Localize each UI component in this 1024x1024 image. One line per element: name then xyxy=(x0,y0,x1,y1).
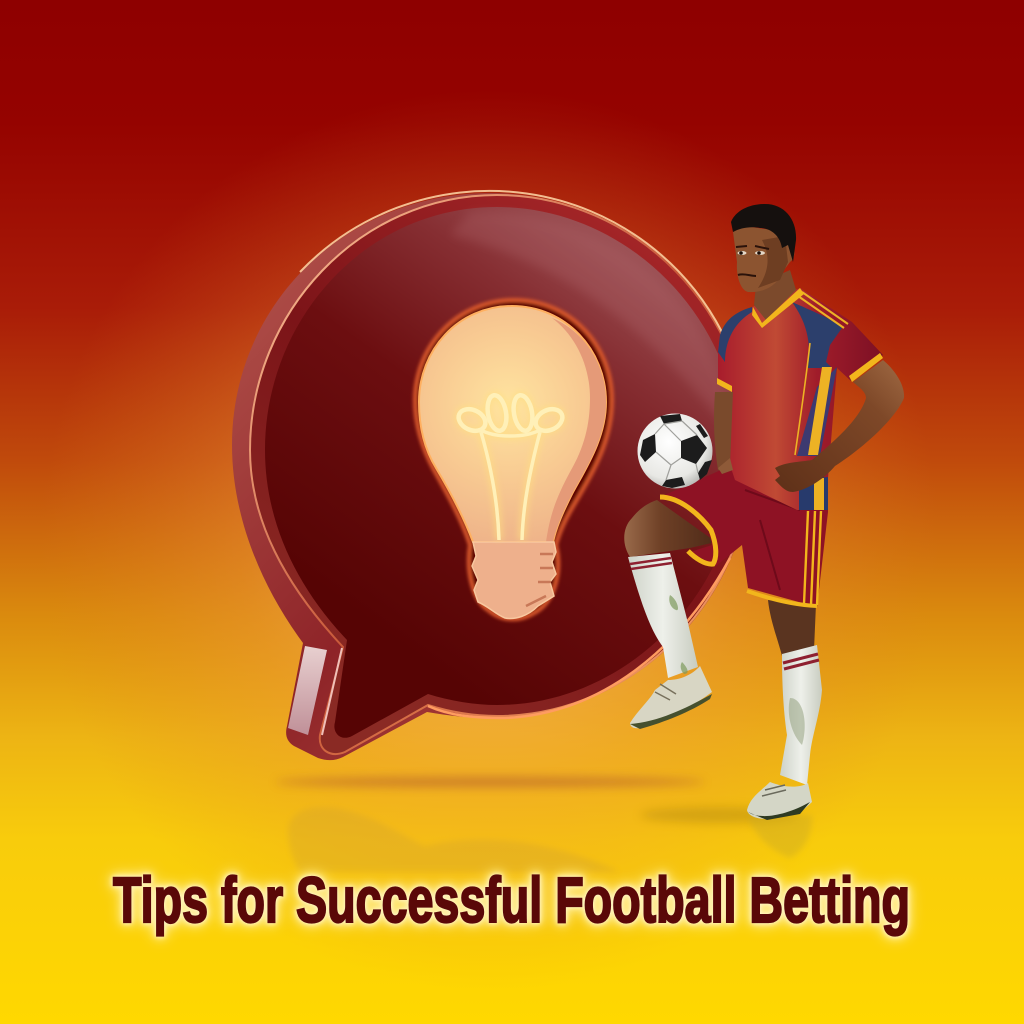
standing leg xyxy=(768,600,816,656)
bulb halo xyxy=(415,300,612,619)
side panel gold stripe xyxy=(808,367,832,455)
football player xyxy=(624,204,904,820)
shoulder stripes xyxy=(798,292,848,328)
shorts xyxy=(660,466,828,607)
head xyxy=(731,204,796,292)
base thread highlights xyxy=(526,554,553,606)
raised leg sock xyxy=(628,553,698,678)
left shoulder navy xyxy=(718,307,752,362)
cheek shading xyxy=(758,236,788,288)
sleeve cuff xyxy=(849,353,883,382)
raglan sleeve navy xyxy=(792,302,842,368)
standing leg sock xyxy=(780,645,822,785)
neck xyxy=(754,270,796,320)
jersey xyxy=(717,288,883,510)
hair xyxy=(731,204,796,262)
bubble front face xyxy=(265,207,740,738)
top rim glint xyxy=(300,191,722,332)
filament glow xyxy=(455,394,566,540)
bulb glass xyxy=(419,306,606,542)
speech bubble xyxy=(232,191,752,760)
soccer ball xyxy=(638,414,712,488)
right arm and hand xyxy=(775,360,904,492)
standing leg boot xyxy=(747,782,812,820)
shirt hem panel xyxy=(799,477,828,510)
face xyxy=(733,226,794,292)
tail highlight panel xyxy=(288,646,327,735)
side panel navy and purple xyxy=(797,367,837,456)
bulb screw base xyxy=(472,542,556,618)
bubble 3D side xyxy=(232,193,752,760)
bottom rim glow xyxy=(428,558,730,718)
raised leg boot xyxy=(630,666,712,729)
filament xyxy=(455,394,566,540)
left arm xyxy=(714,392,733,470)
hand on hip xyxy=(718,458,733,474)
eyes xyxy=(738,251,765,255)
icon: glowing light bulb xyxy=(415,300,612,619)
hem gold stripe xyxy=(814,478,824,510)
yellow piping xyxy=(795,343,810,455)
tail rim lines xyxy=(322,648,342,735)
raised leg thigh xyxy=(624,500,716,557)
left cuff xyxy=(717,378,732,392)
bubble rim xyxy=(250,195,751,754)
floor shadow and reflection of speech bubble xyxy=(275,777,812,872)
bulb right bevel xyxy=(546,318,606,542)
collar xyxy=(752,288,804,328)
brows and mouth xyxy=(736,246,769,276)
glossy sheen xyxy=(450,212,736,440)
